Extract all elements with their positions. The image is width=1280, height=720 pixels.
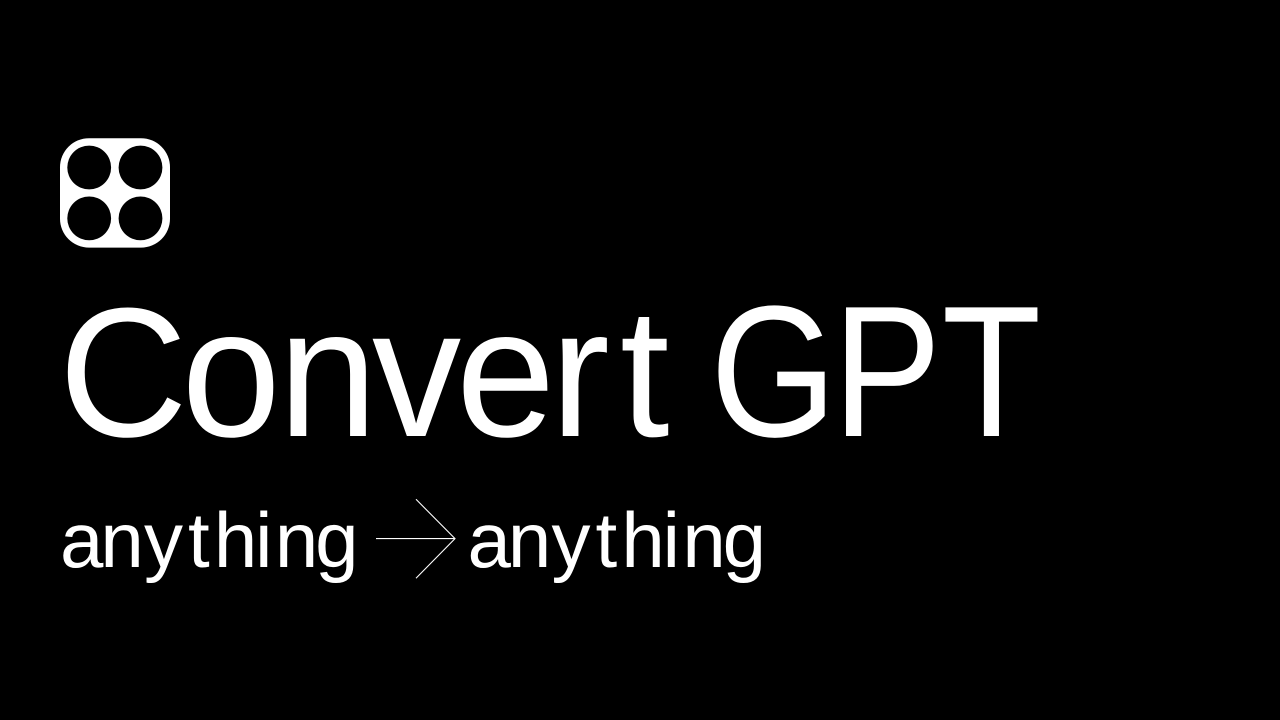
arrow	[376, 499, 455, 578]
subtitle: left word: anything	[60, 496, 358, 584]
title: Convert	[59, 271, 670, 476]
title	[59, 267, 1041, 477]
subtitle: right word: anything	[468, 496, 766, 584]
icon: rounded square with four circles	[60, 138, 170, 248]
title: GPT	[710, 267, 1041, 477]
